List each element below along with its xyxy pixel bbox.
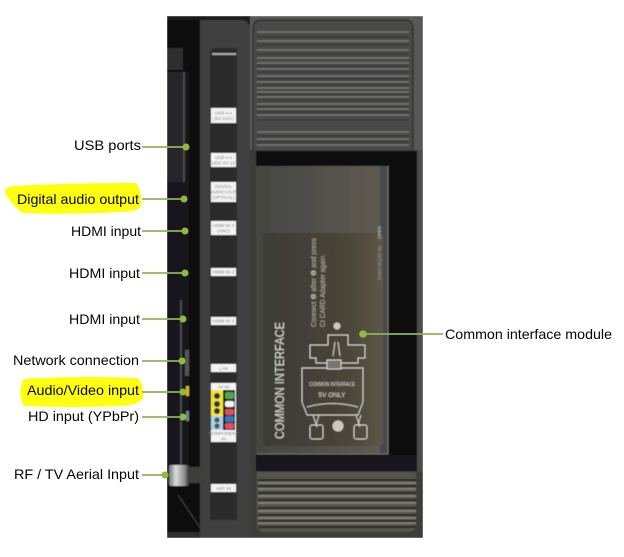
callout: audio video input: Audio/Video input	[27, 382, 139, 398]
port label: USB 1	[211, 108, 236, 123]
port label strip	[200, 20, 250, 538]
port label: digital audio out	[211, 182, 236, 202]
module diagram: COMMON INTERFACE	[309, 382, 355, 388]
instruction text: CI CARD Adapter again.	[320, 254, 327, 327]
bottom vent panel	[250, 472, 423, 538]
port label: USB 1: (5V 0.5A)	[214, 116, 234, 121]
callout: RF TV aerial input: RF / TV Aerial Input	[14, 466, 139, 482]
callout: HDMI input 1	[69, 311, 186, 327]
port label: LAN: LAN	[219, 366, 228, 371]
port label: digital audio out: AUDIO OUT	[211, 190, 236, 194]
port label: AV and component	[209, 383, 239, 442]
port label: HDMI 3	[211, 221, 236, 235]
instruction text: OPEN	[377, 226, 382, 239]
port label: HDMI 3: HDMI IN 3	[213, 223, 235, 228]
callout: HDMI input 3: HDMI input	[71, 223, 141, 239]
port label: AV and component: COMPONENT	[209, 431, 239, 436]
callout: HDMI input 3	[71, 223, 188, 239]
module diagram	[302, 323, 367, 439]
common interface recess	[250, 150, 423, 473]
port label: AV and component: AV IN	[218, 384, 229, 390]
callout: USB ports	[74, 137, 190, 153]
callout: network connection: Network connection	[13, 352, 139, 368]
port label: USB 2: (HDD 5V 1A)	[210, 160, 237, 166]
port label: HDMI 1	[211, 317, 236, 325]
callout: digital audio output: Digital audio output	[17, 191, 139, 207]
common interface instruction label	[263, 226, 383, 446]
port label: HDMI 2	[211, 268, 236, 276]
port label: digital audio out: (OPTICAL)	[212, 195, 235, 200]
highlight: digital audio output	[5, 183, 141, 214]
port label: AV and component: IN	[221, 436, 226, 442]
instruction text: BN68-08118F-00	[377, 245, 382, 280]
callout: USB ports: USB ports	[74, 137, 141, 153]
callout: common interface module	[359, 326, 612, 342]
instruction text	[310, 226, 382, 327]
port label: digital audio out: DIGITAL	[215, 184, 233, 189]
callout: audio video input	[27, 382, 186, 398]
port label: HDMI 3: (ARC)	[217, 228, 230, 234]
port label: HDMI 2: HDMI IN 2	[213, 270, 235, 275]
callout: HDMI input 2: HDMI input	[69, 265, 140, 281]
top vent panel	[250, 16, 423, 151]
module diagram: 5V ONLY	[319, 392, 346, 399]
callout: HD input: HD input (YPbPr)	[28, 408, 139, 424]
port label: HDMI 1: HDMI IN 1	[213, 319, 235, 324]
port label: LAN	[211, 364, 236, 372]
instruction text: Connect ❷ after ❶ and press	[310, 238, 318, 327]
TV back panel photo	[167, 16, 423, 538]
callout: HD input	[28, 408, 186, 424]
callout: common interface module: Common interface module	[445, 326, 612, 342]
highlight: audio video input	[20, 377, 143, 407]
left port column	[167, 20, 250, 538]
port label: USB 1: USB ⟷	[215, 110, 233, 116]
port label: USB 2	[210, 153, 237, 167]
callout: HDMI input 2	[69, 265, 188, 281]
port label: USB 2: USB ⟷	[215, 155, 233, 160]
port label: ANT IN	[211, 484, 236, 492]
port label: ANT IN: ANT IN	[216, 486, 231, 491]
label heading: COMMON INTERFACE	[273, 322, 287, 439]
callout: HDMI input 1: HDMI input	[69, 311, 140, 327]
